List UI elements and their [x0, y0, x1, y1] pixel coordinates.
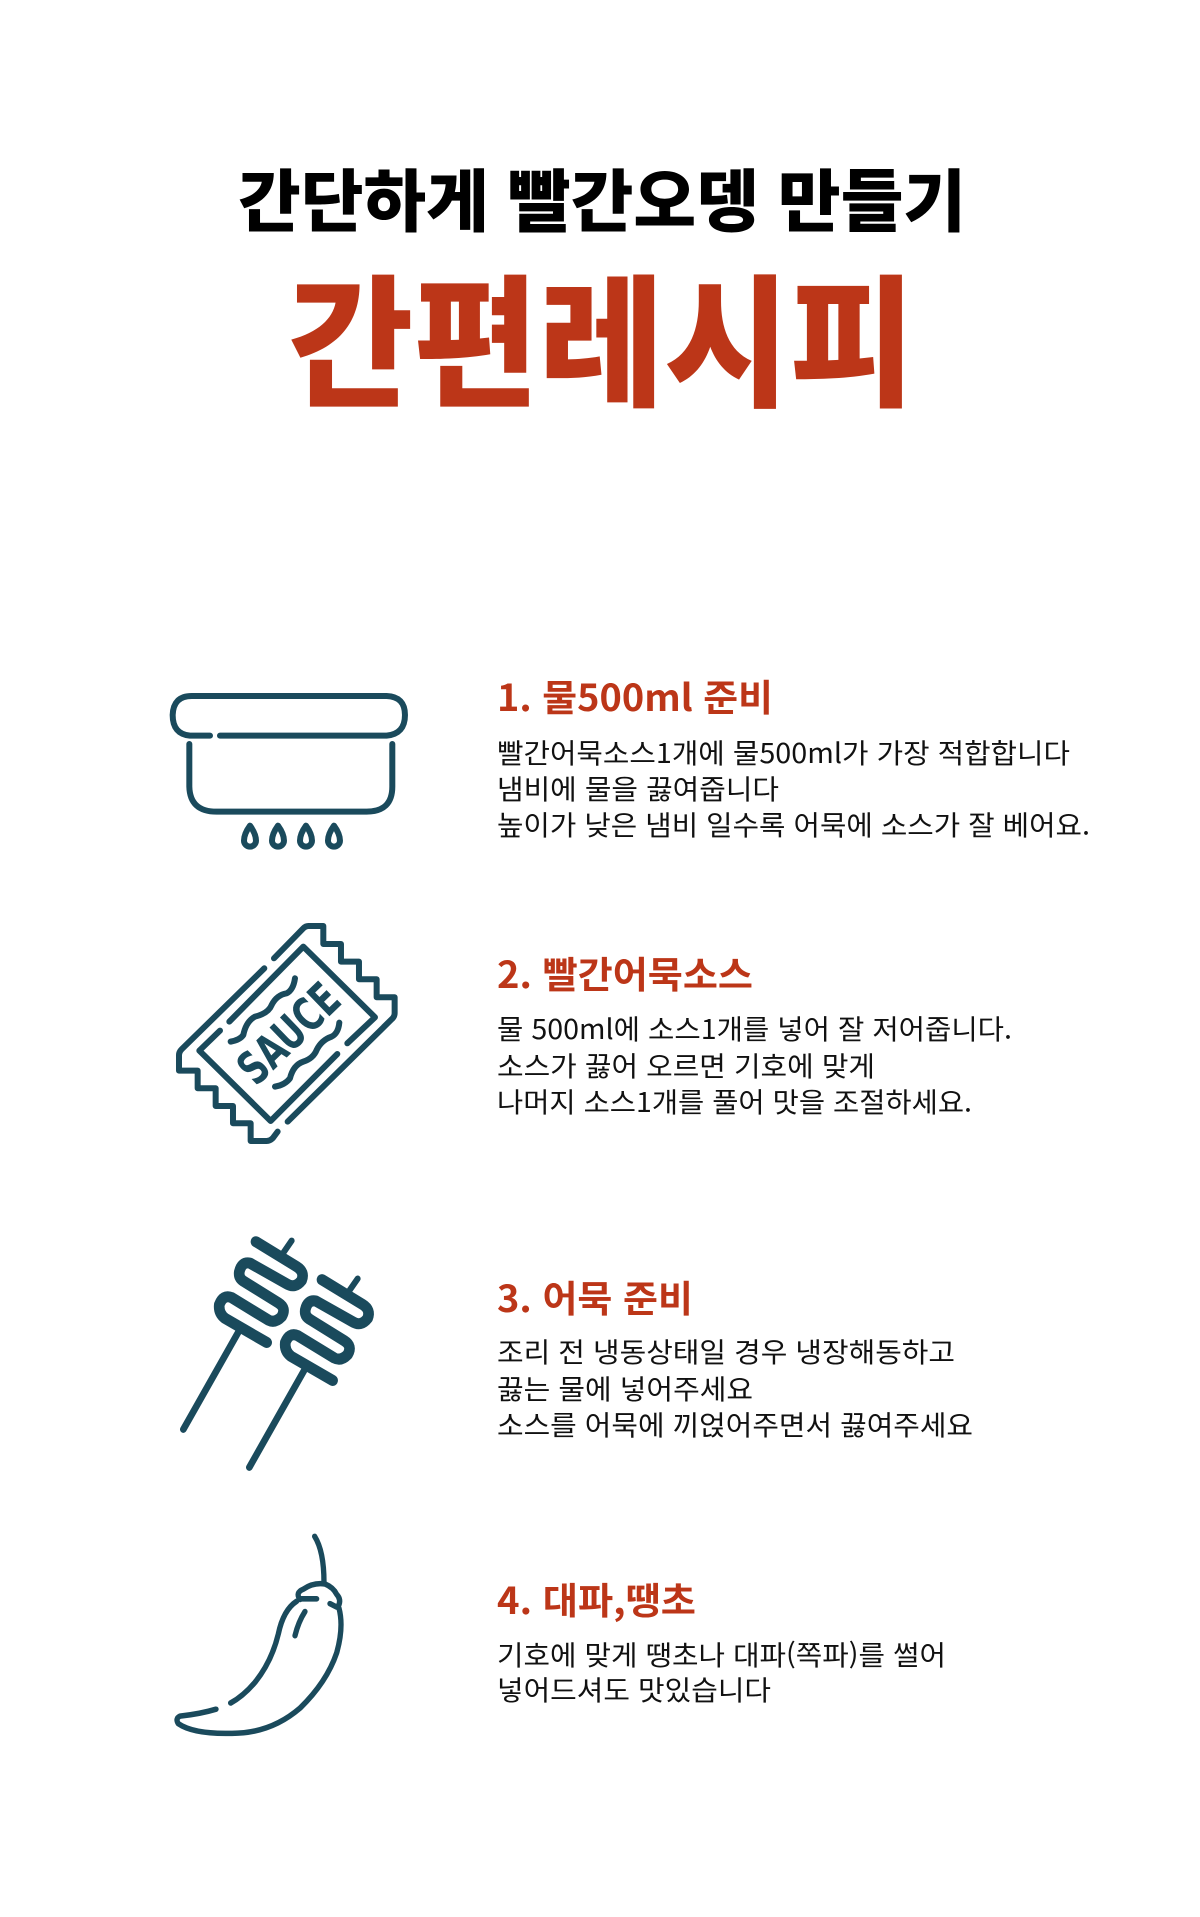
- step 1 body: 냄비에 물을 끓여줍니다: [497, 767, 779, 807]
- step 4 text: [497, 1571, 946, 1708]
- step 2 text: [497, 945, 1012, 1120]
- step 1 body: 빨간어묵소스1개에 물500ml가 가장 적합합니다: [497, 731, 1070, 771]
- icon: chili pepper: [177, 1536, 341, 1733]
- step 1 heading: 1. 물500ml 준비: [497, 668, 773, 722]
- step 4 body: 기호에 맞게 땡초나 대파(쪽파)를 썰어: [497, 1633, 946, 1673]
- title: black heading: 간단하게 빨간오뎅 만들기: [238, 146, 966, 246]
- step 2 body: 소스가 끓어 오르면 기호에 맞게: [497, 1044, 875, 1084]
- step 3 body: 끓는 물에 넣어주세요: [497, 1367, 753, 1407]
- step 4 body: [497, 1633, 946, 1708]
- step 4 body: 넣어드셔도 맛있습니다: [497, 1668, 771, 1708]
- step 2 body: 물 500ml에 소스1개를 넣어 잘 저어줍니다.: [497, 1007, 1012, 1047]
- step 3 body: [497, 1330, 973, 1443]
- skewer left: [183, 1241, 303, 1429]
- icon: pot on burner: [173, 696, 405, 847]
- step 1 body: 높이가 낮은 냄비 일수록 어묵에 소스가 잘 베어요.: [497, 803, 1090, 843]
- icon: fish cake skewers: [183, 1241, 369, 1467]
- step 3 text: [497, 1269, 973, 1443]
- packet label: SAUCE: [226, 972, 351, 1095]
- step 2 body: [497, 1007, 1012, 1120]
- step 4 heading: 4. 대파,땡초: [497, 1571, 696, 1625]
- step 3 heading: 3. 어묵 준비: [497, 1269, 693, 1323]
- icon: sauce packet: [179, 926, 395, 1141]
- title: red heading: 간편레시피: [288, 231, 915, 437]
- step 1 body: [497, 731, 1090, 843]
- step 3 body: 조리 전 냉동상태일 경우 냉장해동하고: [497, 1330, 955, 1370]
- packet outline: [179, 926, 395, 1141]
- step 1 text: [497, 668, 1090, 843]
- step 3 body: 소스를 어묵에 끼얹어주면서 끓여주세요: [497, 1403, 973, 1443]
- step 2 heading: 2. 빨간어묵소스: [497, 945, 753, 999]
- step 2 body: 나머지 소스1개를 풀어 맛을 조절하세요.: [497, 1080, 972, 1120]
- skewer right: [249, 1279, 369, 1467]
